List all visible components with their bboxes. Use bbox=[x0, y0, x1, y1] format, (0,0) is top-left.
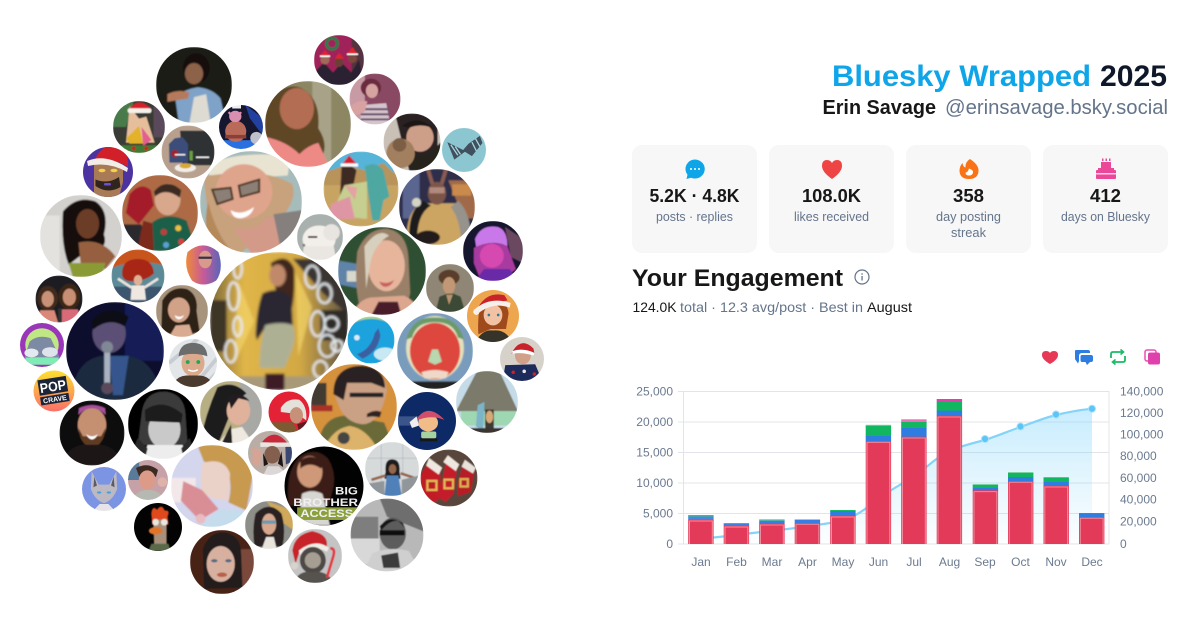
stat card: days on Bluesky: 412 bbox=[1090, 186, 1121, 206]
chart legend icons bbox=[1042, 350, 1160, 365]
month labels: Jan bbox=[691, 555, 711, 569]
bar: Feb bbox=[724, 523, 749, 544]
stat card: posts and replies: 5.2K · 4.8K bbox=[650, 186, 740, 206]
right axis labels: 40,000 bbox=[1120, 492, 1157, 506]
bar: Mar bbox=[759, 519, 785, 544]
avatar: white-haired woman on red bbox=[268, 392, 310, 432]
avatar: Pop Crave logo: CRAVE bbox=[43, 395, 68, 405]
avatar: two smiling women bbox=[36, 276, 82, 322]
stat card: day posting streak: streak bbox=[951, 226, 987, 240]
left axis labels: 20,000 bbox=[636, 415, 673, 429]
stat card: day posting streak bbox=[906, 145, 1031, 253]
right axis labels: 20,000 bbox=[1120, 514, 1157, 528]
avatar: windmill bbox=[456, 371, 518, 433]
right axis labels bbox=[1120, 384, 1164, 551]
avatar: dark-haired woman smiling bbox=[200, 381, 262, 443]
right axis labels: 100,000 bbox=[1120, 428, 1164, 442]
stat card: days on Bluesky: days on Bluesky bbox=[1061, 210, 1151, 224]
left axis labels: 25,000 bbox=[636, 384, 673, 398]
icon: heart bbox=[822, 160, 842, 179]
bar: Apr bbox=[795, 519, 820, 544]
avatar: game character on navy sky bbox=[398, 392, 456, 450]
avatar: Pop Crave logo bbox=[34, 370, 74, 412]
gridlines bbox=[678, 391, 1109, 544]
avatar: blonde woman with teacup, profile bbox=[171, 445, 253, 527]
avatar: woman in santa hat with wreath bbox=[113, 101, 165, 153]
avatar: woman and teal alien in desert bbox=[324, 152, 398, 226]
month labels: Feb bbox=[726, 555, 747, 569]
avatar: Big Brother Access portrait: BIG bbox=[335, 486, 358, 498]
avatar: teal with sunglasses bbox=[442, 128, 486, 172]
bar: Jun bbox=[866, 425, 891, 544]
stat card: days on Bluesky bbox=[1043, 145, 1168, 253]
bar: May bbox=[830, 510, 856, 544]
avatar: woman with long dark hair, bottom bbox=[190, 530, 254, 594]
avatar: man in holiday sweater bbox=[500, 337, 544, 381]
engagement summary: total · 12.3 avg/post · Best in bbox=[680, 299, 863, 315]
engagement chart bbox=[636, 384, 1164, 569]
avatar: sloth in santa hat with candy cane bbox=[288, 529, 342, 583]
avatar: red-haired illustrated woman bbox=[112, 250, 164, 302]
avatar: dolphin in blue water bbox=[348, 316, 396, 364]
month labels: Apr bbox=[798, 555, 817, 569]
bar: Oct bbox=[1008, 472, 1033, 544]
user name and handle: Erin Savage bbox=[822, 97, 936, 119]
avatar: armadillo costume bbox=[399, 169, 475, 245]
avatar: cartoon man in grey cap bbox=[169, 339, 217, 387]
avatar: white fox on periwinkle bbox=[82, 467, 126, 511]
avatar: woman in santa hat making peace sign bbox=[248, 431, 292, 475]
month labels: Aug bbox=[939, 555, 960, 569]
avatar: white lamb bbox=[297, 214, 343, 260]
avatar: blonde and brunette woman selfie bbox=[338, 227, 426, 315]
avatar: main photo, woman among gold lights bbox=[210, 252, 348, 390]
avatar: young man on pastel background bbox=[128, 460, 168, 500]
bar: Jan bbox=[688, 515, 714, 544]
left axis labels: 10,000 bbox=[636, 476, 673, 490]
avatar: Beaker muppet bbox=[134, 503, 182, 551]
avatar: man with glasses and guitar bbox=[311, 364, 397, 450]
avatar: cartoon red-haired woman in santa hat bbox=[467, 290, 519, 342]
avatar: black-haired woman in green top bbox=[40, 195, 122, 277]
right axis labels: 60,000 bbox=[1120, 471, 1157, 485]
avatar: smiling bearded man bbox=[60, 400, 124, 466]
user name and handle bbox=[822, 97, 1168, 119]
icon: flame bbox=[960, 159, 979, 179]
avatar: three women in santa hats bbox=[314, 35, 364, 85]
avatar: pig figure bbox=[219, 105, 263, 149]
avatar: Big Brother Access portrait bbox=[284, 446, 364, 526]
avatar: woman in striped shirt, pink tint bbox=[350, 74, 400, 124]
avatar: purple and green logo with cloud bbox=[20, 323, 64, 367]
stat card: likes received: 108.0K bbox=[802, 186, 861, 206]
left axis labels: 0 bbox=[666, 537, 673, 551]
right axis labels: 0 bbox=[1120, 537, 1127, 551]
avatar: man with small dog bbox=[384, 114, 440, 170]
icon: likes heart bbox=[1042, 351, 1058, 364]
icon: info bbox=[855, 270, 869, 284]
avatar: Big Brother Access portrait: ACCESS bbox=[300, 508, 353, 520]
month labels: Jul bbox=[906, 555, 922, 569]
heading: Your Engagement: Your Engagement bbox=[632, 265, 843, 292]
right axis labels: 140,000 bbox=[1120, 384, 1164, 398]
stat card: day posting streak: 358 bbox=[953, 186, 984, 206]
month labels bbox=[691, 555, 1103, 569]
avatar: woman in denim dress bbox=[365, 442, 419, 496]
icon: quotes squares bbox=[1145, 350, 1160, 364]
title: Bluesky Wrapped bbox=[832, 60, 1091, 93]
stat card: day posting streak: day posting bbox=[936, 210, 1001, 224]
right axis labels: 120,000 bbox=[1120, 406, 1164, 420]
month labels: Nov bbox=[1045, 555, 1067, 569]
stat card: posts and replies bbox=[632, 145, 757, 253]
avatar: orange and blue painted portrait bbox=[186, 245, 221, 284]
avatar: black and white woman with bangs bbox=[128, 389, 198, 459]
left axis labels: 15,000 bbox=[636, 446, 673, 460]
right axis labels: 80,000 bbox=[1120, 449, 1157, 463]
avatar: renaissance noblewoman bbox=[426, 264, 474, 312]
engagement summary: 124.0K bbox=[632, 299, 677, 315]
avatar: curly-haired woman with sunglasses bbox=[245, 501, 293, 549]
stat card: likes received: likes received bbox=[794, 210, 869, 224]
avatar: man with microphone bbox=[66, 302, 164, 400]
month labels: Oct bbox=[1011, 555, 1030, 569]
avatar: brunette woman with bookshelf bbox=[156, 285, 208, 337]
avatar: couple in holiday shirt bbox=[122, 175, 198, 251]
cumulative area and line bbox=[701, 405, 1096, 544]
month labels: Jun bbox=[869, 555, 888, 569]
bar: Aug bbox=[937, 399, 962, 544]
avatar: Big Brother Access portrait: BROTHER bbox=[293, 497, 358, 509]
avatar: table with items bbox=[162, 126, 214, 178]
avatar: black and white man in sunglasses bbox=[350, 498, 424, 572]
title: 2025 bbox=[1100, 60, 1167, 93]
icon: replies bubbles bbox=[1075, 350, 1093, 365]
avatar: girl in striped sweater bbox=[156, 47, 232, 123]
icon: birthday cake bbox=[1096, 158, 1116, 179]
avatar: watermelon face bbox=[397, 313, 473, 389]
bar: Nov bbox=[1044, 477, 1069, 544]
avatar: blonde woman in pink top bbox=[265, 81, 351, 167]
avatar bubble cluster bbox=[20, 35, 544, 594]
avatar: purple cartoon santa bbox=[83, 144, 133, 197]
bar: Sep bbox=[973, 484, 998, 544]
avatar: blonde woman with glasses and cap bbox=[200, 151, 302, 253]
left axis labels: 5,000 bbox=[643, 506, 673, 520]
icon: reposts arrows bbox=[1111, 350, 1125, 364]
stacked bars bbox=[688, 399, 1104, 544]
bar: Dec bbox=[1079, 513, 1104, 544]
avatar: woman with purple hat and neon light bbox=[463, 221, 523, 281]
stat card: posts and replies: posts · replies bbox=[656, 210, 733, 224]
month labels: May bbox=[832, 555, 854, 569]
icon: speech bubble bbox=[685, 160, 705, 179]
month labels: Dec bbox=[1081, 555, 1103, 569]
bar: Jul bbox=[901, 419, 927, 544]
avatar: red holiday stockings bbox=[420, 450, 478, 506]
engagement summary bbox=[632, 299, 912, 315]
month labels: Mar bbox=[762, 555, 782, 569]
stat card: likes received bbox=[769, 145, 894, 253]
left axis labels bbox=[636, 384, 673, 551]
user name and handle: @erinsavage.bsky.social bbox=[945, 97, 1168, 119]
engagement summary: August bbox=[867, 299, 912, 315]
avatar: Pop Crave logo: POP bbox=[39, 377, 67, 396]
month labels: Sep bbox=[974, 555, 996, 569]
